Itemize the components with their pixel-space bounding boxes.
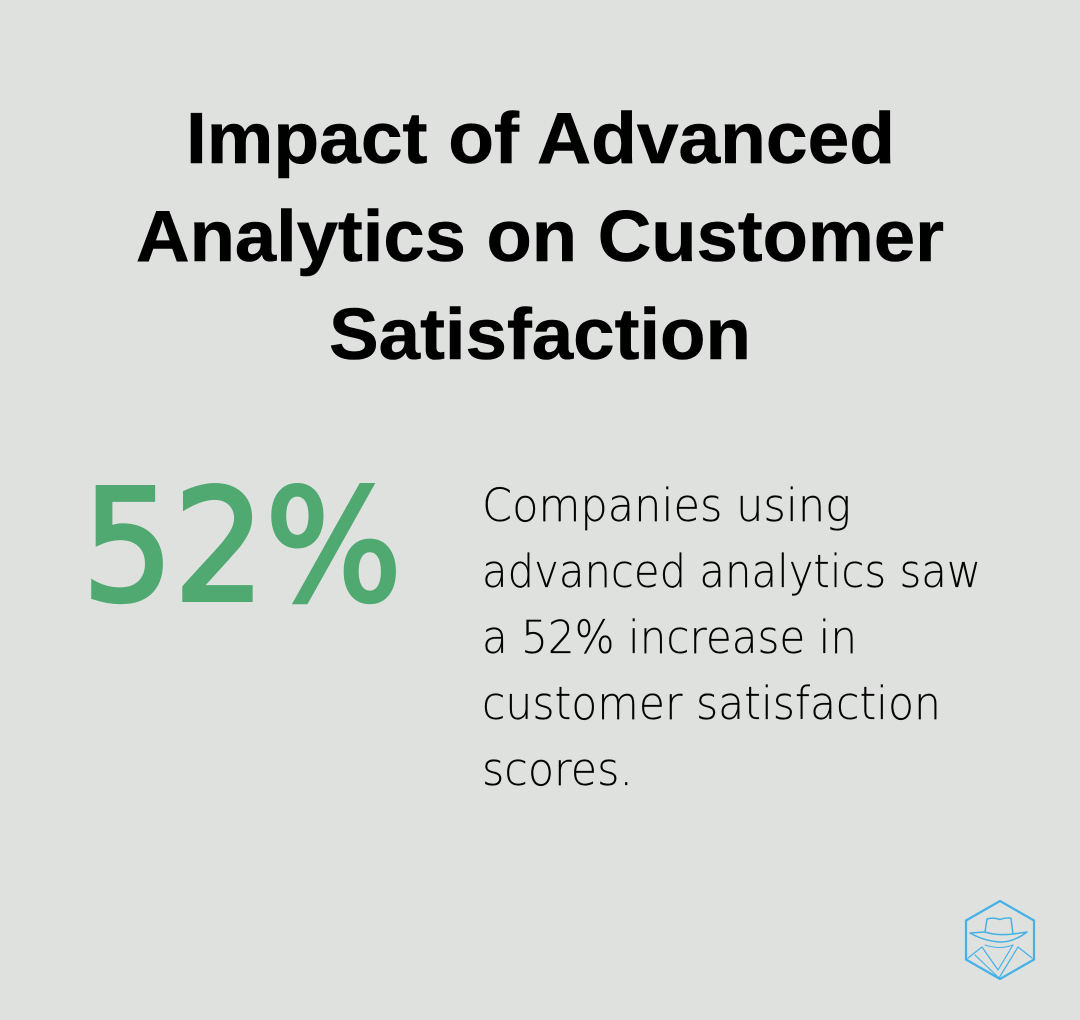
description text: customer satisfaction: [482, 677, 941, 730]
title: Satisfaction: [329, 295, 751, 375]
title: [136, 99, 944, 375]
description text: scores.: [482, 743, 633, 796]
title: Analytics on Customer: [136, 197, 944, 277]
description text: Companies using: [482, 479, 851, 532]
icon: hexagon logo with hat and suit: [966, 901, 1034, 979]
big statistic: 52%: 52%: [82, 456, 402, 637]
description text: advanced analytics saw: [482, 545, 981, 598]
description text: a 52% increase in: [482, 611, 857, 664]
description text: [482, 479, 981, 796]
title: Impact of Advanced: [186, 99, 895, 179]
